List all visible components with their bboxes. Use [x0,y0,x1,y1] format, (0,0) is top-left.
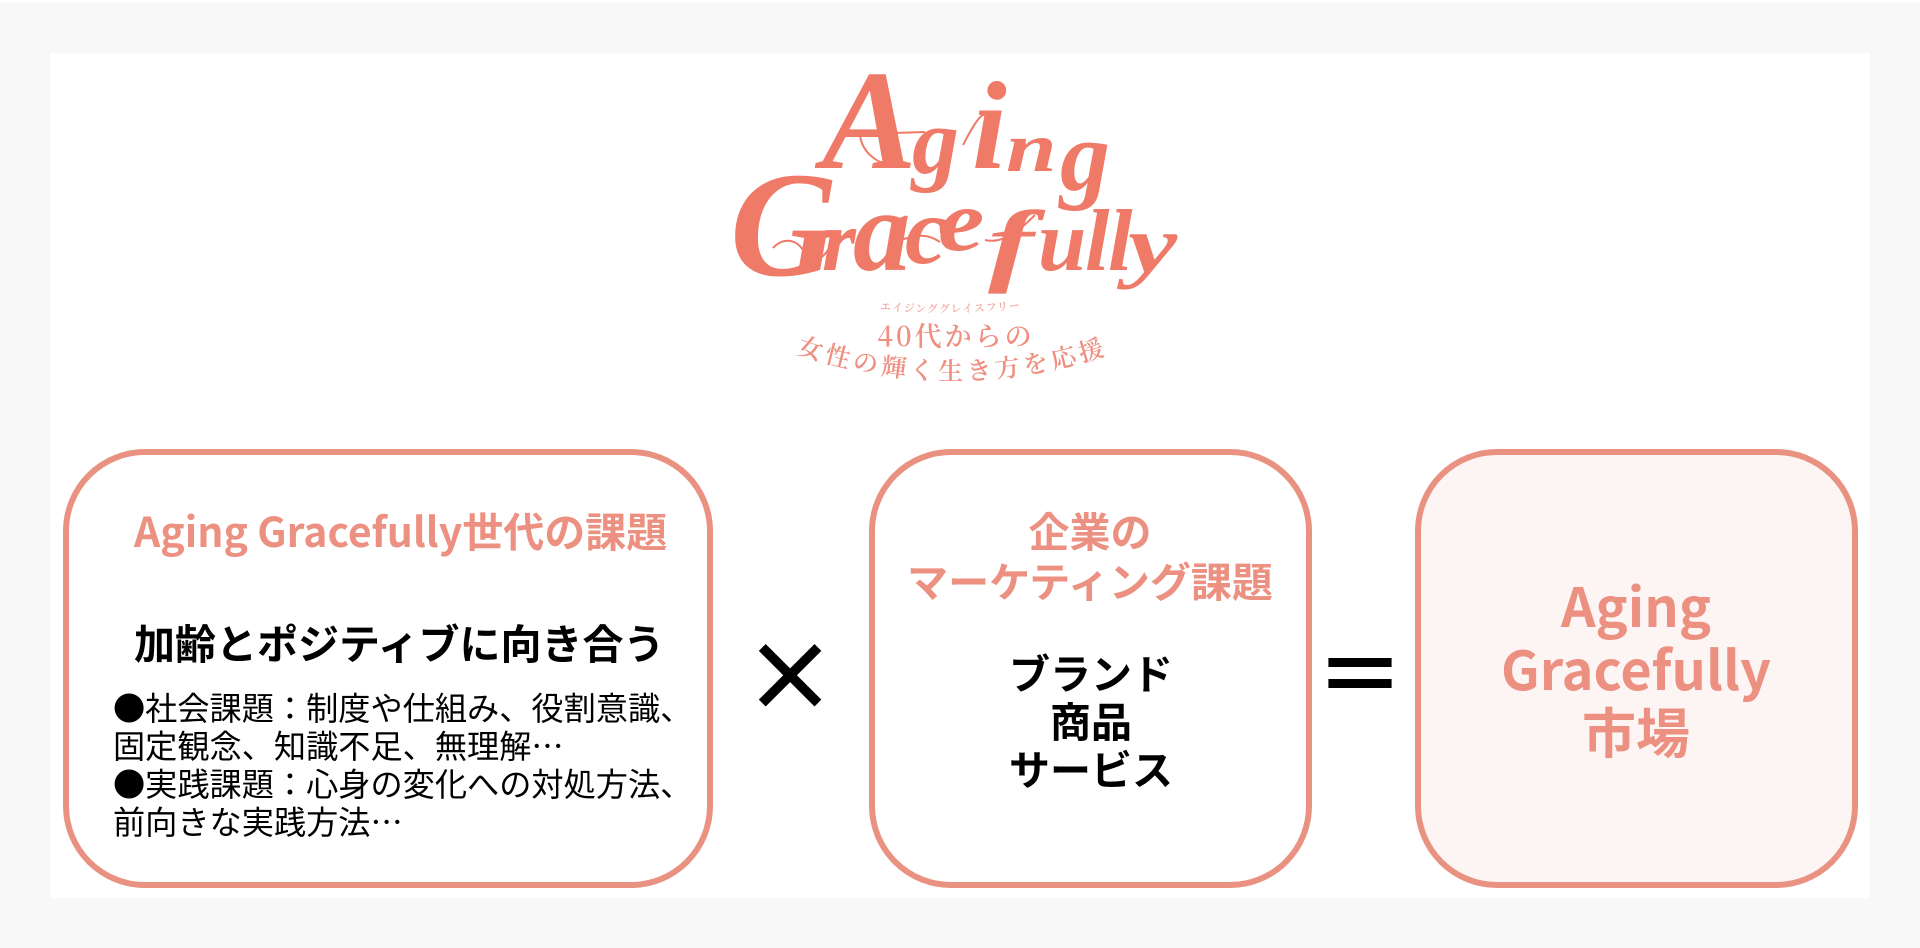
subheading: 加齢とポジティブに向き合う [134,611,665,671]
panel heading: 企業の [1028,499,1152,559]
logo: Aging Gracefully: f [988,192,1046,294]
brand product service list [1009,640,1173,796]
logo: Aging Gracefully: G [730,142,838,308]
panel: Aging Gracefully generation issues [63,449,713,888]
market label: Gracefully [1501,627,1771,706]
market label: 市場 [1582,690,1690,769]
logo: Aging Gracefully: l [1108,193,1133,290]
logo subtitle [796,302,1105,381]
panel: corporate marketing issues [869,449,1312,888]
issue list [113,684,692,844]
brand product service list: 商品 [1050,688,1132,748]
logo: Aging Gracefully: r [822,192,857,289]
logo: Aging Gracefully: l [1085,193,1110,290]
panel heading: マーケティング課題 [907,549,1273,609]
brand product service list: ブランド [1009,640,1173,700]
logo subtitle: 40代からの [877,315,1035,354]
panel heading [907,499,1273,609]
logo: Aging Gracefully: e [938,172,984,269]
logo: Aging Gracefully: y [1117,200,1178,291]
panel heading: Aging Gracefully世代の課題 [134,499,667,559]
panel: Aging Gracefully market [1415,449,1858,888]
market label [1501,564,1771,769]
logo: Aging Gracefully: i [972,58,1007,196]
issue list: 固定観念、知識不足、無理解… [113,722,564,768]
issue list: ●社会課題：制度や仕組み、役割意識、 [113,684,692,730]
logo: Aging Gracefully: g [1058,101,1110,212]
logo subtitle: エイジンググレイスフリー [880,302,1019,314]
market label: Aging [1561,564,1711,643]
logo: Aging Gracefully: u [1038,192,1086,289]
brand product service list: サービス [1009,736,1173,796]
logo: Aging Gracefully: g [910,90,959,194]
top light strip [0,0,1920,3]
logo: Aging Gracefully [730,50,1178,381]
issue list: ●実践課題：心身の変化への対処方法、 [113,760,692,806]
logo: Aging Gracefully: c [905,178,947,284]
logo subtitle: 女性の輝く生き方を応援 [796,336,1105,381]
logo: Aging Gracefully: n [1006,109,1057,187]
issue list: 前向きな実践方法… [113,798,403,844]
logo: Aging Gracefully: a [853,168,910,295]
